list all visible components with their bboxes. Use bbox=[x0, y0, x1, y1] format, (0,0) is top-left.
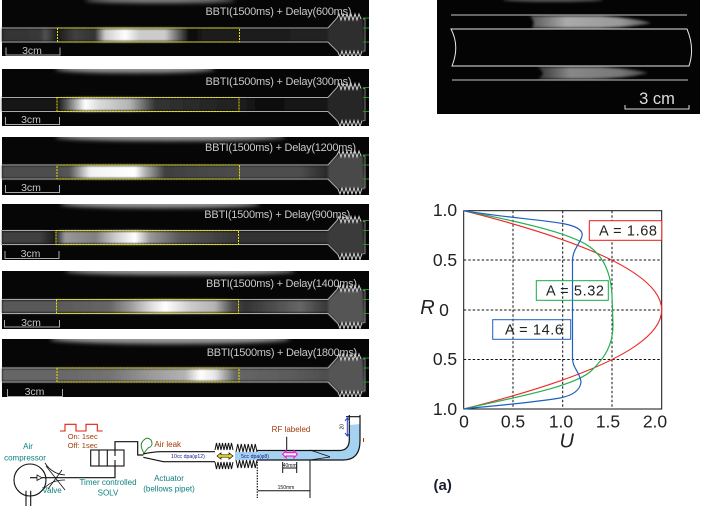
actuator label: (bellows pipet) bbox=[143, 485, 195, 494]
yellow double arrow bbox=[217, 453, 233, 459]
panel: delay 900 ms: BBTI(1500ms) + Delay(900ms) bbox=[204, 209, 350, 221]
label: A = 1.68: A = 1.68 bbox=[599, 224, 657, 240]
small mark bbox=[363, 438, 364, 442]
x axis labels: 1.5 bbox=[596, 412, 620, 432]
label: A = 5.32: A = 5.32 bbox=[546, 284, 604, 300]
curve: A = 14.6 bbox=[464, 211, 582, 409]
panel: annular MRI image, top right: 3 cm bbox=[639, 90, 675, 108]
y axis labels: 1.0 bbox=[433, 399, 457, 419]
timing text bbox=[68, 432, 98, 450]
x axis labels bbox=[459, 412, 667, 453]
y axis labels: R bbox=[420, 297, 435, 319]
y axis labels: 0 bbox=[439, 300, 449, 320]
dimension lines: 40mm bbox=[283, 463, 297, 469]
panel: delay 300 ms bbox=[0, 69, 369, 126]
square wave timing pulse bbox=[60, 424, 103, 431]
inner horn bbox=[310, 450, 330, 460]
panel: delay 600 ms bbox=[0, 0, 369, 57]
blue liquid in pipe bbox=[235, 424, 360, 460]
panel: delay 1800 ms bbox=[0, 339, 369, 398]
panel: delay 1200 ms: BBTI(1500ms) + Delay(1200ms) bbox=[205, 142, 356, 154]
velocity profile chart bbox=[420, 200, 667, 453]
curve: A = 1.68 bbox=[464, 211, 662, 409]
10 cc tube label: 10cc dpa(φ12) bbox=[171, 454, 205, 460]
panel: delay 1200 ms bbox=[0, 137, 369, 195]
x axis labels: U bbox=[559, 431, 574, 453]
curve: A = 5.32 bbox=[464, 211, 613, 409]
panel: annular MRI image, top right bbox=[437, 0, 700, 114]
schematic: experimental setup bbox=[4, 415, 364, 506]
scale bar bbox=[625, 105, 689, 109]
panel: delay 1800 ms: BBTI(1500ms) + Delay(1800ms) bbox=[207, 347, 357, 359]
air leak bbox=[141, 438, 182, 453]
actuator tube bbox=[143, 452, 215, 462]
outer wall lines bbox=[451, 15, 688, 80]
label: A = 14.6 bbox=[493, 320, 571, 339]
bottom signal blob bbox=[537, 67, 648, 79]
label: A = 1.68 bbox=[589, 221, 662, 240]
pipe walls bbox=[257, 415, 360, 460]
y axis labels: 1.0 bbox=[433, 200, 457, 220]
panel: delay 600 ms: BBTI(1500ms) + Delay(600ms) bbox=[206, 6, 352, 18]
air compressor label: Air bbox=[23, 442, 33, 451]
air leak: Air leak bbox=[154, 440, 182, 449]
5 cc tube label: 5cc dpa(φ8) bbox=[241, 454, 269, 460]
label: A = 5.32 bbox=[536, 281, 608, 300]
panel: delay 1200 ms: 3cm bbox=[21, 182, 41, 194]
x axis labels: 0.5 bbox=[501, 412, 525, 432]
bellows pair bbox=[215, 443, 257, 469]
y axis labels: 0.5 bbox=[433, 349, 457, 369]
panel: delay 900 ms: 3cm bbox=[21, 248, 41, 260]
timer controlled SOLV label: Timer controlled bbox=[79, 478, 137, 487]
head height arrow bbox=[340, 418, 350, 436]
RF labeled bbox=[272, 425, 310, 458]
panel: delay 1400 ms: BBTI(1500ms) + Delay(1400ms) bbox=[206, 278, 357, 290]
panel: delay 1400 ms: 3cm bbox=[21, 317, 41, 329]
panel: delay 900 ms bbox=[0, 204, 369, 260]
air line and solenoid valve bbox=[30, 442, 143, 490]
label: A = 14.6: A = 14.6 bbox=[505, 322, 563, 338]
RF labeled: RF labeled bbox=[272, 425, 310, 434]
panel: delay 300 ms: 3cm bbox=[21, 114, 41, 126]
timing text: On: 1sec bbox=[68, 432, 98, 441]
panel: delay 1800 ms: 3cm bbox=[25, 386, 45, 398]
compressor bbox=[14, 464, 46, 506]
panel: delay 1400 ms bbox=[0, 271, 369, 329]
x axis labels: 2.0 bbox=[643, 412, 667, 432]
timing text: Off: 1sec bbox=[68, 441, 98, 450]
valve label: Valve bbox=[42, 486, 62, 495]
panel: delay 600 ms: 3cm bbox=[22, 45, 42, 57]
head height arrow: 20 bbox=[340, 424, 346, 429]
panel: delay 300 ms: BBTI(1500ms) + Delay(300ms) bbox=[206, 76, 352, 88]
y axis labels bbox=[420, 200, 457, 419]
dimension lines: 150mm bbox=[278, 485, 294, 491]
x axis labels: 1.0 bbox=[549, 412, 573, 432]
timer controlled SOLV label: SOLV bbox=[98, 489, 119, 498]
x axis labels: 0 bbox=[459, 412, 469, 432]
top signal blob bbox=[530, 16, 651, 28]
y axis labels: 0.5 bbox=[433, 250, 457, 270]
panel label (a): (a) bbox=[434, 477, 452, 494]
dimension lines bbox=[257, 460, 310, 498]
inner tube outline bbox=[451, 29, 692, 66]
air compressor label: compressor bbox=[4, 453, 46, 462]
actuator label: Actuator bbox=[154, 474, 184, 483]
